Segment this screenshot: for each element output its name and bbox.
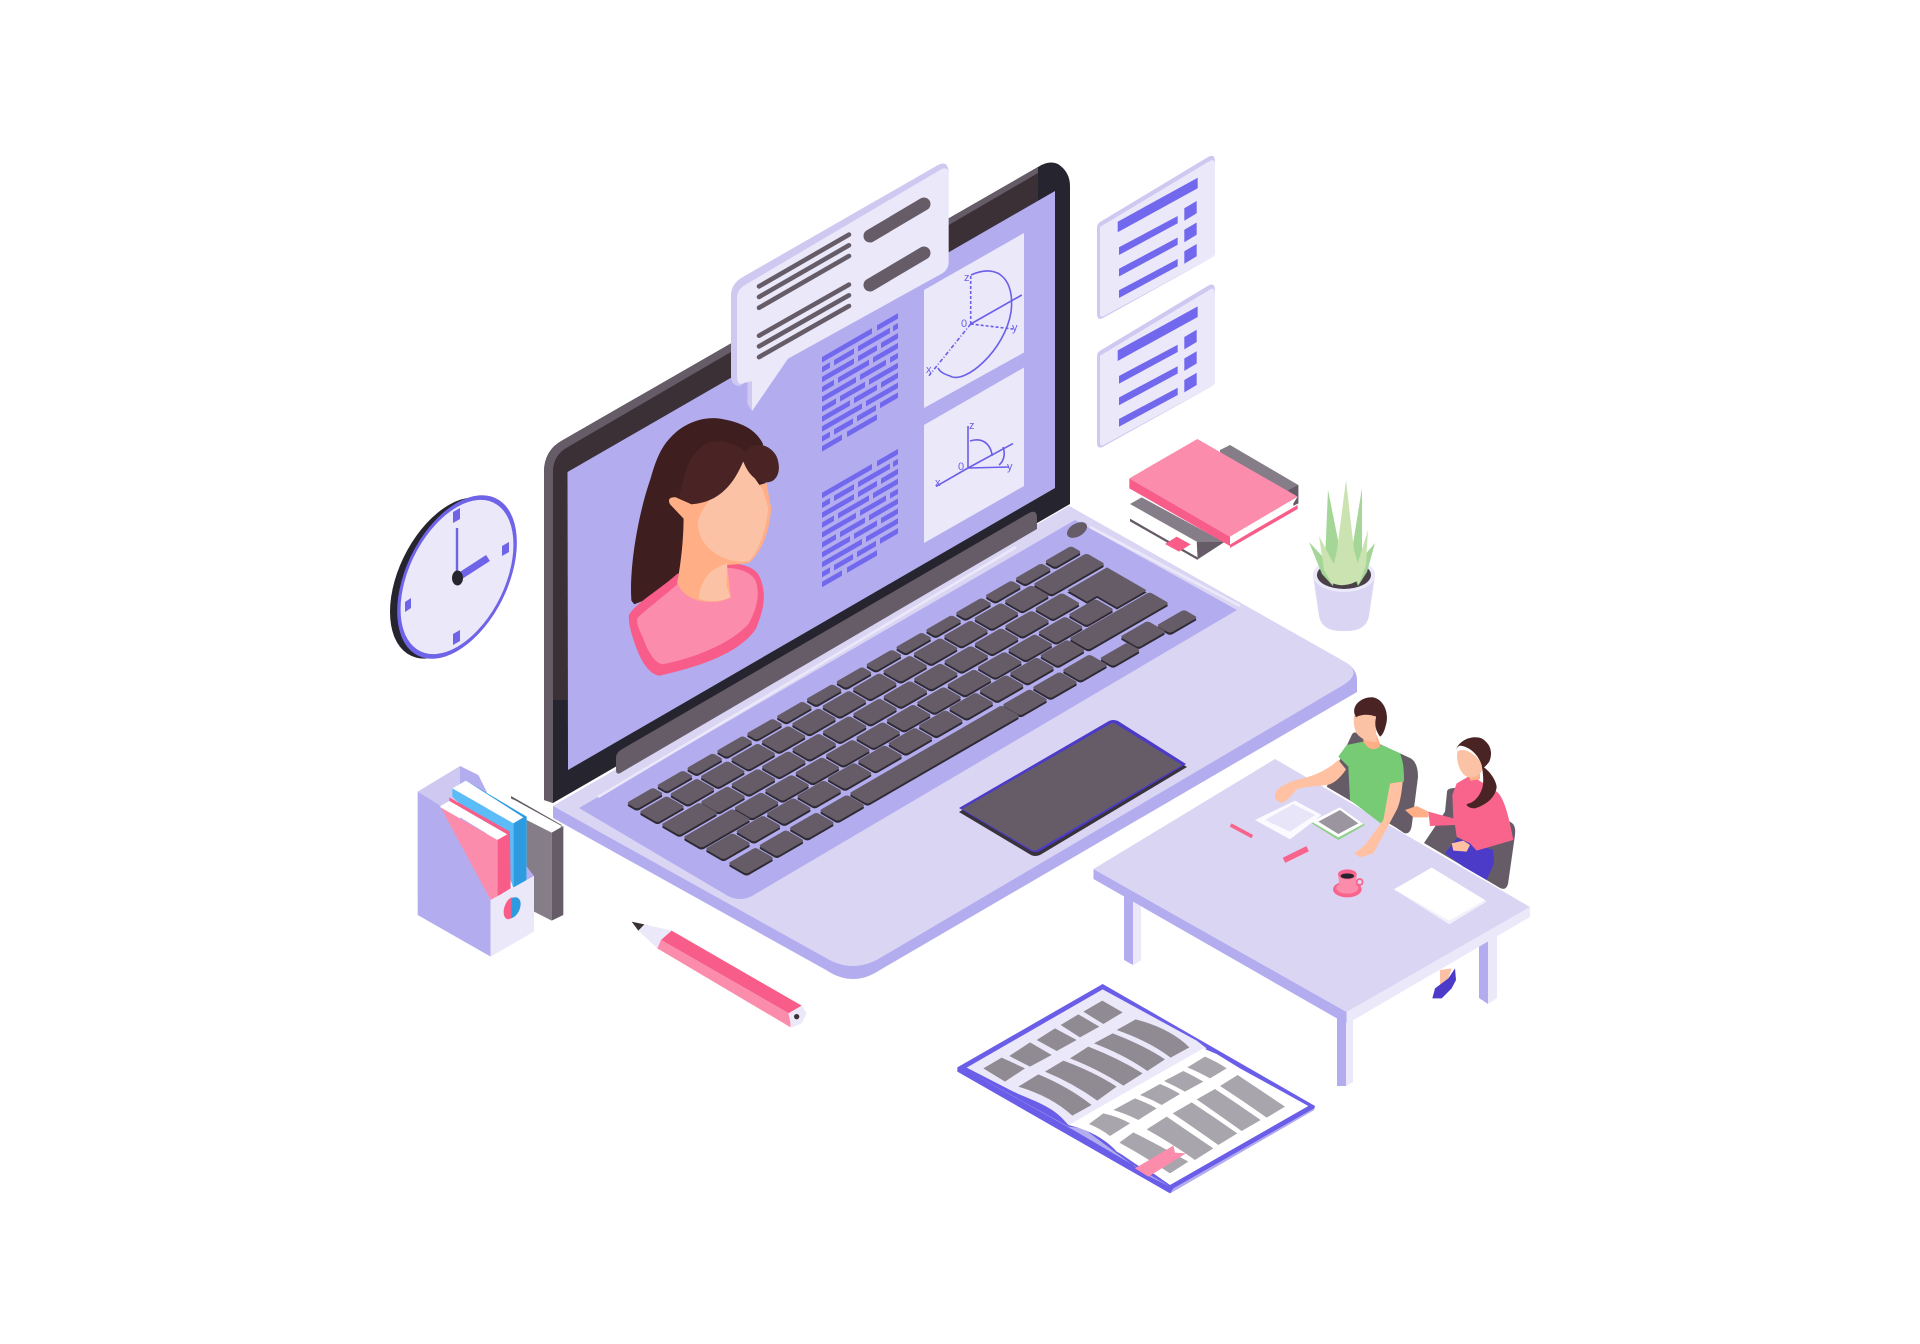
diagram panel: angle axes: 0	[958, 461, 964, 473]
screen	[568, 191, 1055, 770]
hinge	[616, 512, 1037, 774]
back left leg	[1124, 894, 1141, 965]
bookmark	[1135, 1146, 1186, 1177]
diagram panel: 3D axes: 0	[961, 318, 967, 330]
left page cells	[983, 1001, 1189, 1116]
front hair	[679, 441, 779, 504]
holder back	[460, 766, 487, 900]
list card 1	[1097, 156, 1215, 319]
left page	[967, 989, 1207, 1125]
front leg	[1337, 1018, 1346, 1086]
right leg	[1479, 937, 1488, 1004]
face	[698, 461, 768, 562]
neck	[1469, 768, 1480, 781]
tablet	[1312, 809, 1365, 840]
man	[1275, 697, 1404, 857]
power button	[1064, 519, 1090, 541]
keyboard well	[579, 520, 1237, 899]
magazine holder with books	[418, 766, 563, 957]
long hair	[631, 418, 766, 604]
text block 2	[822, 449, 898, 587]
grey book	[511, 796, 562, 827]
woman	[1405, 737, 1513, 998]
stacked books	[1129, 439, 1298, 560]
holder hole	[504, 897, 513, 919]
speech bubble	[731, 164, 949, 411]
hand	[1405, 806, 1428, 817]
pencil	[632, 922, 807, 1027]
keyboard	[626, 546, 1196, 877]
hair	[1354, 697, 1387, 737]
arm left	[1275, 760, 1346, 803]
woman on screen	[629, 418, 779, 676]
table legs	[1124, 894, 1497, 1004]
diagram panel: 3D axes	[924, 233, 1024, 408]
pencil on table	[1231, 825, 1252, 837]
leg	[1440, 968, 1452, 988]
right page cells	[1089, 1057, 1285, 1173]
items on table	[1231, 801, 1487, 924]
holder sides	[418, 792, 491, 957]
table top	[1094, 759, 1530, 1086]
paper stack	[1394, 868, 1487, 924]
ruler	[1284, 849, 1308, 860]
shirt	[1338, 742, 1404, 827]
shoe	[1432, 968, 1456, 998]
text block 1	[822, 313, 898, 452]
open book	[957, 984, 1315, 1193]
woman's chair	[1424, 788, 1515, 889]
diagram panel: 3D axes: y	[1012, 322, 1018, 334]
head	[1354, 713, 1377, 742]
coffee cup	[1333, 881, 1362, 897]
diagram panel: angle axes: x	[935, 477, 941, 489]
diagram panel: 3D axes: z	[964, 272, 970, 284]
diagram panel: angle axes	[924, 368, 1024, 543]
neck	[669, 483, 771, 602]
documents	[1255, 801, 1322, 839]
list card 2	[1097, 284, 1215, 448]
diagram panel: angle axes: z	[969, 420, 974, 432]
diagram panel: angle axes: y	[1007, 461, 1013, 473]
trackpad	[959, 720, 1187, 856]
hand on lap	[1452, 841, 1470, 852]
blue book	[466, 781, 527, 888]
clock	[390, 471, 515, 685]
man's chair	[1327, 732, 1418, 833]
shirt	[629, 563, 764, 676]
laptop base	[553, 506, 1357, 979]
skirt	[1445, 838, 1494, 880]
laptop screen lid	[544, 163, 1070, 803]
right page	[1068, 1048, 1308, 1185]
diagram panel: 3D axes: x	[926, 364, 932, 376]
neck	[1363, 735, 1382, 752]
head	[1457, 750, 1483, 778]
sweater	[1428, 777, 1513, 851]
pink book	[449, 797, 510, 835]
potted plant	[1309, 480, 1375, 631]
arm right	[1354, 782, 1403, 857]
hair	[1456, 737, 1497, 808]
deck highlights	[598, 547, 1016, 797]
